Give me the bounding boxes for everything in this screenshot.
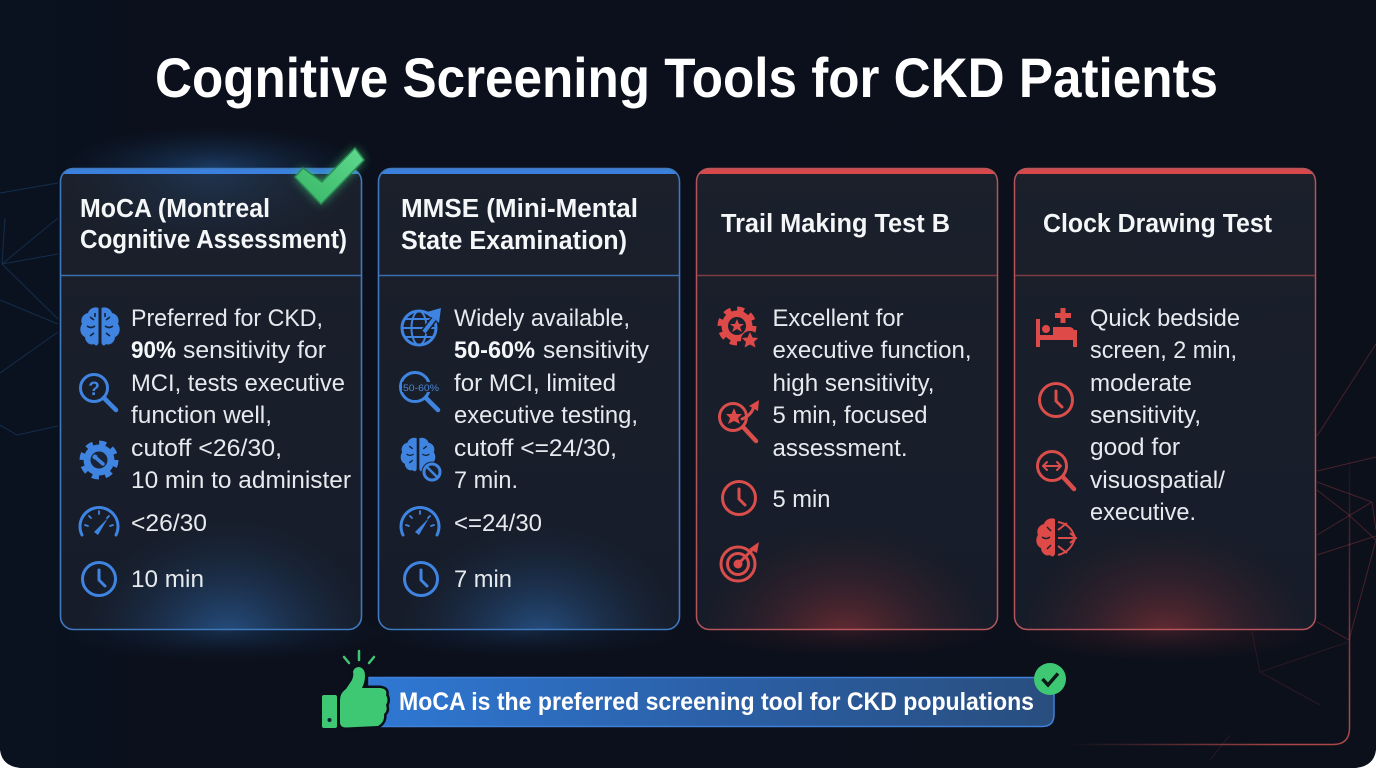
text block: Trail Making description: 5 min, focused bbox=[772, 402, 928, 429]
heading: MoCA: Cognitive Assessment) bbox=[80, 226, 347, 254]
text: MoCA time: 10 min bbox=[131, 566, 204, 593]
text block: MMSE description bbox=[454, 305, 650, 494]
text block: MMSE description: cutoff <=24/30, bbox=[454, 435, 617, 462]
banner text: MoCA is the preferred screening tool for CKD populations bbox=[399, 688, 1034, 716]
panel: Clock Drawing Test bbox=[1014, 168, 1316, 630]
heading: MoCA: MoCA (Montreal bbox=[80, 195, 270, 223]
card background bbox=[378, 168, 680, 630]
text block: MMSE description: sensitivity bbox=[543, 337, 650, 364]
panel: Trail Making Test B bbox=[696, 168, 998, 630]
text block: Clock Drawing description: executive. bbox=[1090, 499, 1196, 526]
icon: clock bbox=[82, 562, 116, 596]
card background bbox=[696, 168, 998, 630]
text block: Clock Drawing description bbox=[1090, 305, 1240, 526]
text: MMSE time: 7 min bbox=[454, 566, 512, 593]
text block: Trail Making description: assessment. bbox=[772, 435, 908, 462]
heading: MMSE: State Examination) bbox=[401, 227, 627, 255]
text block: MoCA description: 90% bbox=[131, 337, 176, 364]
text: MoCA cutoff: <26/30 bbox=[131, 510, 207, 537]
icon: gear with wrench bbox=[82, 444, 116, 476]
text block: MoCA description: Preferred for CKD, bbox=[131, 305, 323, 332]
heading: MoCA bbox=[80, 195, 347, 254]
card background bbox=[60, 168, 362, 630]
icon: magnifier with arrows bbox=[1038, 452, 1074, 489]
heading: MMSE bbox=[401, 195, 638, 255]
heading: Trail Making Test B: Trail Making Test B bbox=[721, 210, 950, 238]
icon: gauge bbox=[401, 508, 439, 535]
text block: Clock Drawing description: visuospatial/ bbox=[1090, 467, 1225, 494]
panel: MoCA bbox=[60, 144, 368, 630]
heading: MMSE: MMSE (Mini-Mental bbox=[401, 195, 638, 223]
text block: Trail Making description: high sensitivity, bbox=[772, 370, 934, 397]
text block: MMSE description: for MCI, limited bbox=[454, 370, 616, 397]
icon: gauge bbox=[80, 508, 118, 535]
icon: hospital bed bbox=[1036, 308, 1077, 347]
text block: MoCA description: function well, bbox=[131, 402, 272, 429]
text block: Clock Drawing description: Quick bedside bbox=[1090, 305, 1240, 332]
callout: MoCA recommendation banner bbox=[322, 651, 1066, 728]
text block: MMSE description: Widely available, bbox=[454, 305, 630, 332]
heading: Clock Drawing Test: Clock Drawing Test bbox=[1043, 210, 1272, 238]
icon: clock bbox=[722, 482, 756, 514]
icon: green check mark bbox=[295, 148, 364, 204]
text block: Trail Making description bbox=[772, 305, 972, 462]
text block: Clock Drawing description: sensitivity, bbox=[1090, 402, 1201, 429]
text: MMSE cutoff: <=24/30 bbox=[454, 510, 542, 537]
icon: globe with arrow bbox=[402, 308, 441, 345]
card background bbox=[1014, 168, 1316, 630]
text block: Clock Drawing description: good for bbox=[1090, 434, 1180, 461]
icon: question magnifier: ? bbox=[88, 379, 100, 400]
text block: Clock Drawing description: moderate bbox=[1090, 370, 1192, 397]
text block: MMSE description: executive testing, bbox=[454, 402, 638, 429]
icon: brain with ban sign bbox=[401, 438, 442, 482]
title: Cognitive Screening Tools for CKD Patients bbox=[155, 46, 1218, 109]
text block: Trail Making description: executive function, bbox=[772, 337, 972, 364]
banner bar bbox=[369, 678, 1054, 726]
icon: gear with stars bbox=[720, 310, 759, 349]
text block: Clock Drawing description: screen, 2 min, bbox=[1090, 337, 1237, 364]
icon: 50-60% magnifier bbox=[400, 372, 440, 410]
icon: 50-60% magnifier: 50-60% bbox=[403, 383, 439, 393]
icon: clock bbox=[404, 562, 438, 596]
text block: MoCA description: 10 min to administer bbox=[131, 467, 351, 494]
icon: magnifier with star and arrow bbox=[720, 400, 759, 441]
text block: MoCA description bbox=[131, 305, 351, 494]
text: Trail Making time: 5 min bbox=[772, 486, 830, 513]
icon: brain with arrows bbox=[1036, 518, 1076, 556]
icon: brain bbox=[80, 307, 120, 345]
icon: green check badge bbox=[1034, 663, 1066, 695]
icon: thumbs up bbox=[322, 651, 388, 728]
text block: Trail Making description: Excellent for bbox=[772, 305, 904, 332]
text block: MoCA description: sensitivity for bbox=[183, 337, 326, 364]
icon: target with arrow bbox=[721, 542, 759, 581]
text block: MMSE description: 7 min. bbox=[454, 467, 518, 494]
icon: clock bbox=[1040, 384, 1072, 416]
panel: MMSE bbox=[378, 168, 680, 630]
icon: question magnifier bbox=[80, 374, 116, 410]
text block: MMSE description: 50-60% bbox=[454, 337, 535, 364]
text block: MoCA description: cutoff <26/30, bbox=[131, 435, 282, 462]
text block: MoCA description: MCI, tests executive bbox=[131, 370, 345, 397]
